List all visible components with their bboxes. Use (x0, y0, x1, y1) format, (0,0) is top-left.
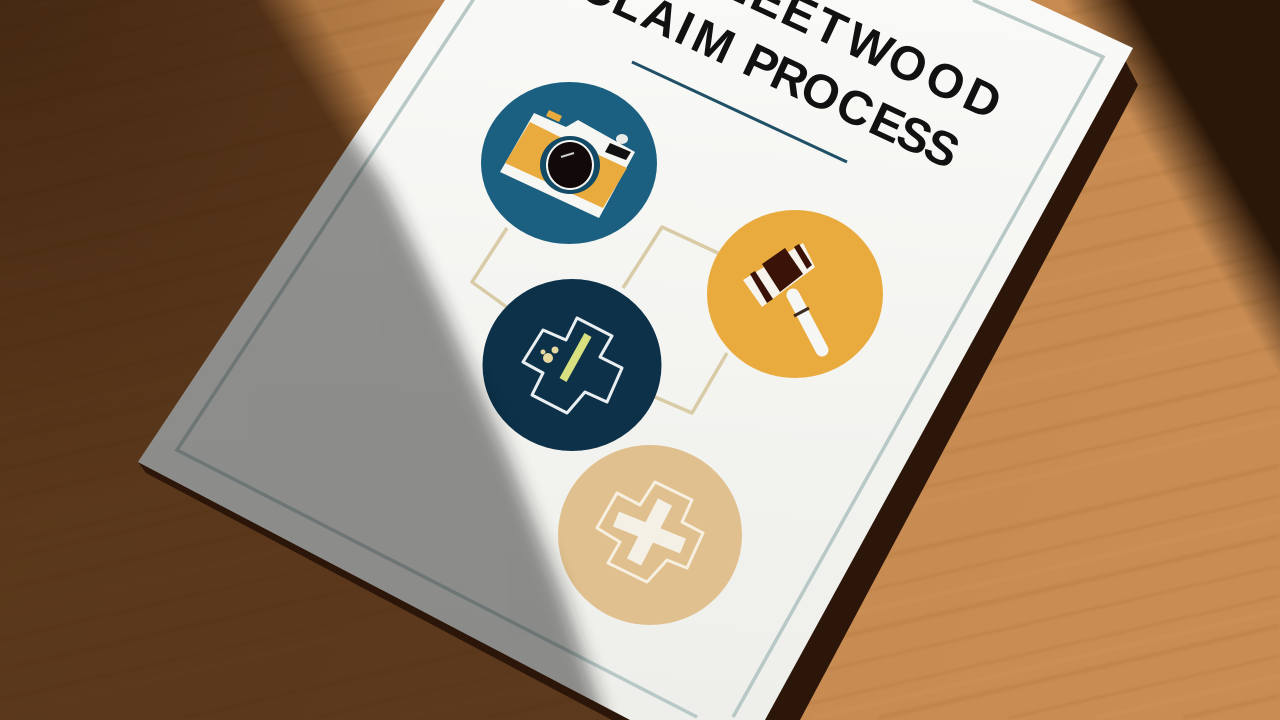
icon: medical cross (597, 482, 703, 582)
step 2: gavel badge (707, 210, 883, 378)
connector lines (472, 227, 727, 413)
step 1: camera badge (481, 82, 657, 244)
cover frame border left and bottom (177, 0, 697, 717)
booklet thickness edge (138, 60, 1138, 720)
step 3: document cross badge (482, 279, 662, 451)
booklet (138, 0, 1138, 720)
booklet cover (138, 0, 1133, 720)
cover frame border right (733, 0, 1103, 717)
icon: gavel (743, 243, 822, 350)
shadow across booklet (138, 128, 614, 711)
title rule (632, 62, 847, 162)
icon: outlined cross with bar (523, 318, 622, 413)
icon: camera (500, 110, 635, 218)
step 4: medical cross badge (558, 445, 742, 625)
